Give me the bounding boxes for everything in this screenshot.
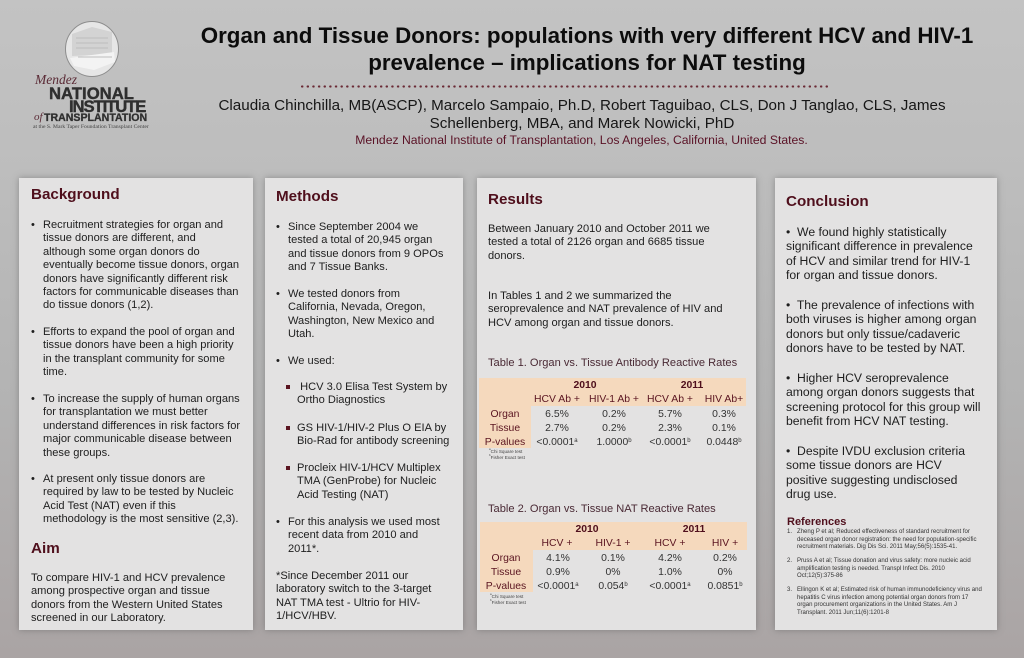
panel: methods: • bbox=[276, 516, 280, 528]
reference 1 bbox=[787, 528, 977, 550]
panel: background: • bbox=[31, 393, 35, 405]
table 2 header band bbox=[480, 522, 747, 550]
title bbox=[201, 23, 973, 75]
panel: conclusion: Transplant. 2011 Jun;11(6):1201-8 bbox=[797, 610, 889, 616]
panel: background: time. bbox=[43, 366, 67, 378]
panel: background: methodology is the most sensitive (2,3). bbox=[43, 513, 238, 525]
panel: background: these groups. bbox=[43, 447, 110, 459]
aim text bbox=[31, 572, 225, 624]
panel: conclusion: hepatitis C virus infection among potential organ donors from 17 bbox=[797, 595, 968, 601]
conclusion point 4 bbox=[786, 444, 966, 501]
panel: methods: Acid Testing (NAT) bbox=[297, 489, 388, 501]
panel: background: donors have significantly different risk bbox=[43, 273, 228, 285]
panel: background: factors for communicable diseases than bbox=[43, 286, 238, 298]
results paragraph 2: seroprevalence and NAT prevalence of HIV and bbox=[488, 303, 723, 315]
table 1: <0.0001b bbox=[649, 437, 691, 448]
heading: methods: Methods bbox=[276, 188, 338, 205]
table 2: 0.2% bbox=[713, 553, 737, 564]
panel: conclusion: deceased organ donor registration: the need for population-specific bbox=[797, 537, 977, 543]
table 2 footnotes bbox=[490, 592, 526, 605]
panel: methods: TMA (GenProbe) for Nucleic bbox=[297, 475, 436, 487]
row: tissue: Tissue bbox=[491, 567, 521, 578]
dotted divider bbox=[301, 85, 831, 88]
row: organ: Organ bbox=[492, 553, 520, 564]
panel: background: At present only tissue donors are bbox=[43, 473, 205, 485]
panel: methods: and tissue donors from 9 OPOs bbox=[288, 248, 443, 260]
panel: methods: • bbox=[276, 355, 280, 367]
table 2: 0.9% bbox=[546, 567, 570, 578]
panel: conclusion: 2. bbox=[787, 558, 792, 564]
results paragraph 1: Between January 2010 and October 2011 we bbox=[488, 223, 710, 235]
aim text: among prospective organ and tissue bbox=[31, 585, 210, 597]
conclusion point 3: • Higher HCV seroprevalence bbox=[786, 371, 949, 385]
panel: background: major communicable disease between bbox=[43, 433, 232, 445]
row: organ: Organ bbox=[491, 409, 519, 420]
year 2011: 2011 bbox=[681, 380, 703, 391]
sub-bullet: Procleix bbox=[286, 462, 441, 501]
authors: Schellenberg, MBA, and Marek Nowicki, PhD bbox=[430, 114, 734, 132]
table 2 footnotes: a Chi Square test bbox=[490, 592, 523, 599]
table 1: 0.1% bbox=[712, 423, 736, 434]
table 1 bbox=[479, 378, 746, 456]
panel: methods: • bbox=[276, 221, 280, 233]
table 2: HIV + bbox=[712, 538, 738, 549]
heading: results: Results bbox=[488, 191, 543, 208]
panel: conclusion: recruitment materials. Dig Dis Sci. 2011 May;56(5):1535-41. bbox=[797, 544, 957, 550]
table 2: HCV + bbox=[655, 538, 685, 549]
logo: Mendez National Institute of Transplantation bbox=[33, 21, 149, 130]
sub-bullet: HCV Elisa bbox=[286, 381, 448, 406]
panel: methods: We used: bbox=[288, 355, 335, 367]
aim text: To compare HIV-1 and HCV prevalence bbox=[31, 572, 225, 584]
table 1 caption: Table 1. Organ vs. Tissue Antibody Reactive Rates bbox=[488, 357, 737, 369]
panel: methods: recent data from 2010 and bbox=[288, 529, 418, 541]
panel: background: • bbox=[31, 473, 35, 485]
bullet 2 bbox=[31, 326, 235, 378]
panel: conclusion: Oct;12(5):375-86 bbox=[797, 573, 843, 579]
panel: background: tissue donors have been a high priority bbox=[43, 339, 234, 351]
conclusion point 3: among organ donors suggests that bbox=[786, 385, 974, 399]
panel: background: in the transplant community for some bbox=[43, 353, 225, 365]
table 2: 0.1% bbox=[601, 553, 625, 564]
panel: methods: 2011*. bbox=[288, 543, 319, 555]
footnote text: NAT TMA test - Ultrio for HIV- bbox=[276, 597, 420, 609]
logo word: National: NATIONAL bbox=[49, 84, 134, 102]
table 2 bbox=[480, 522, 747, 600]
table 1 header band bbox=[479, 378, 746, 406]
footnote text: *Since December 2011 our bbox=[276, 570, 408, 582]
panel: background: eventually become tissue donors, organ bbox=[43, 259, 239, 271]
panel: conclusion: Ellingon K et al; Estimated risk of human immunodeficiency virus and bbox=[797, 587, 982, 593]
row: p-values: P-values bbox=[485, 437, 525, 448]
aim text: screened in our Laboratory. bbox=[31, 612, 166, 624]
table 2 footnotes: b Fisher Exact test bbox=[490, 598, 526, 605]
panel: conclusion: Zheng P et al; Reduced effectiveness of standard recruitment for bbox=[797, 529, 970, 535]
panel: methods: We tested donors from bbox=[288, 288, 400, 300]
year 2010: 2010 bbox=[575, 524, 599, 535]
heading: references: References bbox=[787, 516, 846, 528]
panel: methods: Procleix HIV-1/HCV Multiplex bbox=[297, 462, 441, 474]
method bullet 1 bbox=[276, 221, 443, 273]
panel: methods: tested a total of 20,945 organ bbox=[288, 234, 432, 246]
table 2: 0.0851b bbox=[707, 581, 743, 592]
results paragraph 1: tested a total of 2126 organ and 6685 tissue bbox=[488, 236, 704, 248]
panel: background: • bbox=[31, 326, 35, 338]
table 1: HIV Ab+ bbox=[705, 394, 743, 405]
panel: methods: For this analysis we used most bbox=[288, 516, 440, 528]
panel: conclusion bbox=[775, 178, 997, 630]
table 1: 1.0000b bbox=[596, 437, 632, 448]
table 1: 0.0448b bbox=[706, 437, 742, 448]
logo word: Transplantation: TRANSPLANTATION bbox=[44, 112, 147, 124]
table 1 footnotes: b Fisher Exact test bbox=[489, 453, 525, 460]
title: Organ and Tissue Donors: populations with very different HCV and HIV-1 bbox=[201, 23, 973, 48]
results paragraph 2: HCV among organ and tissue donors. bbox=[488, 317, 674, 329]
footnote text: 1/HCV/HBV. bbox=[276, 610, 337, 622]
conclusion point 2: donors but only tissue/cadaveric bbox=[786, 327, 960, 341]
authors: Claudia Chinchilla, MB(ASCP), Marcelo Sampaio, Ph.D, Robert Taguibao, CLS, Don J Tanglao, CLS, James bbox=[218, 96, 946, 114]
row: p-values: P-values bbox=[486, 581, 526, 592]
conclusion point 1: of HCV and similar trend for HIV-1 bbox=[786, 254, 970, 268]
panel: background bbox=[19, 178, 253, 630]
conclusion point 4: drug use. bbox=[786, 487, 837, 501]
panel: background: To increase the supply of human organs bbox=[43, 393, 240, 405]
conclusion point 1: for organ and tissue donors. bbox=[786, 268, 938, 282]
table 1: <0.0001a bbox=[536, 437, 578, 448]
panel: methods: Ortho Diagnostics bbox=[297, 394, 385, 406]
logo tagline: at the S. Mark Taper Foundation Transplant Center bbox=[33, 124, 149, 130]
table 1 footnotes: a Chi Square test bbox=[489, 447, 522, 454]
table 2 caption: Table 2. Organ vs. Tissue NAT Reactive Rates bbox=[488, 503, 716, 515]
table 2: 1.0% bbox=[658, 567, 682, 578]
panel: methods: Bio-Rad for antibody screening bbox=[297, 435, 449, 447]
title: prevalence – implications for NAT testing bbox=[368, 50, 806, 75]
year 2010: 2010 bbox=[573, 380, 597, 391]
table 2 row label band bbox=[480, 550, 533, 592]
conclusion point 3: benefit from HCV NAT testing. bbox=[786, 414, 949, 428]
table 2: <0.0001a bbox=[537, 581, 579, 592]
footnote text: laboratory switch to the 3-target bbox=[276, 583, 431, 595]
method bullet 2 bbox=[276, 288, 434, 340]
table 2: HIV-1 + bbox=[596, 538, 630, 549]
panel: methods: HCV 3.0 Elisa Test System by bbox=[300, 381, 447, 393]
panel: methods bbox=[265, 178, 463, 630]
column headers: HCV + bbox=[542, 538, 572, 549]
logo word: Institute: INSTITUTE bbox=[69, 96, 145, 116]
table 2: <0.0001a bbox=[649, 581, 691, 592]
panel: conclusion: organ procurement organizations in the United States. Am J bbox=[797, 602, 957, 608]
table 1: HCV Ab + bbox=[647, 394, 693, 405]
panel: background: Acid Test (NAT) even if this bbox=[43, 500, 176, 512]
column headers: HCV Ab + bbox=[534, 394, 580, 405]
results paragraph 1 bbox=[488, 223, 710, 262]
table 2: 0% bbox=[605, 567, 621, 578]
panel: conclusion: amplification testing is needed. Transpl Infect Dis. 2010 bbox=[797, 566, 945, 572]
table 2: 0.054b bbox=[598, 581, 628, 592]
table 1 row label band bbox=[479, 406, 531, 448]
panel: conclusion: 1. bbox=[787, 529, 792, 535]
table 1: HIV-1 Ab + bbox=[589, 394, 639, 405]
heading: background: Background bbox=[31, 186, 120, 203]
results paragraph 1: donors. bbox=[488, 250, 525, 262]
table 2: 0% bbox=[717, 567, 733, 578]
year 2011: 2011 bbox=[683, 524, 705, 535]
heading: conclusion: Conclusion bbox=[786, 193, 869, 210]
aim text: donors from the Western United States bbox=[31, 599, 223, 611]
table 1: 0.2% bbox=[602, 409, 626, 420]
table 1: 2.7% bbox=[545, 423, 569, 434]
conclusion point 2 bbox=[786, 298, 976, 355]
table 1 footnotes bbox=[489, 447, 525, 460]
conclusion point 1: significant difference in prevalence bbox=[786, 239, 973, 253]
conclusion point 1 bbox=[786, 225, 973, 282]
conclusion point 4: some tissue donors are HCV bbox=[786, 458, 942, 472]
sub-bullet: GS HIV bbox=[286, 422, 449, 447]
results paragraph 2: In Tables 1 and 2 we summarized the bbox=[488, 290, 672, 302]
panel: background: Efforts to expand the pool of organ and bbox=[43, 326, 235, 338]
panel: methods: Utah. bbox=[288, 328, 315, 340]
logo script: of: of bbox=[34, 111, 43, 123]
method bullet 4 bbox=[276, 516, 440, 555]
panel: background: for transplantation we must better bbox=[43, 406, 208, 418]
panel: methods: Since September 2004 we bbox=[288, 221, 418, 233]
panel: background: although some organ donors do bbox=[43, 246, 200, 258]
row: tissue: Tissue bbox=[490, 423, 520, 434]
method bullet 3 bbox=[276, 355, 335, 367]
panel: background: do tissue donors (1,2). bbox=[43, 299, 153, 311]
panel: background: • bbox=[31, 219, 35, 231]
conclusion point 2: • The prevalence of infections with bbox=[786, 298, 974, 312]
conclusion point 3: screening protocol for this group will bbox=[786, 400, 980, 414]
table 2: 4.1% bbox=[546, 553, 570, 564]
panel: conclusion: Pruss A et al; Tissue donation and virus safety: more nucleic acid bbox=[797, 558, 971, 564]
heading: aim: Aim bbox=[31, 540, 60, 557]
conclusion point 1: • We found highly statistically bbox=[786, 225, 947, 239]
panel: background: understand differences in risk factors for bbox=[43, 420, 240, 432]
reference 2 bbox=[787, 558, 971, 579]
affiliation: Mendez National Institute of Transplantation, Los Angeles, California, United States. bbox=[355, 133, 808, 147]
bullet 4 bbox=[31, 473, 238, 525]
bullet 3 bbox=[31, 393, 240, 459]
table 2: 4.2% bbox=[658, 553, 682, 564]
conclusion point 3 bbox=[786, 371, 980, 428]
bullet 1 bbox=[31, 219, 239, 311]
panel: results bbox=[477, 178, 756, 630]
reference 3 bbox=[787, 586, 982, 616]
conclusion point 4: • Despite IVDU exclusion criteria bbox=[786, 444, 965, 458]
panel: methods: Washington, New Mexico and bbox=[288, 315, 434, 327]
conclusion point 2: both viruses is higher among organ bbox=[786, 312, 976, 326]
panel: methods: • bbox=[276, 288, 280, 300]
panel: background: required by law to be tested by Nucleic bbox=[43, 486, 234, 498]
results paragraph 2 bbox=[488, 290, 723, 329]
panel: methods: California, Nevada, Oregon, bbox=[288, 301, 426, 313]
table 1: 5.7% bbox=[658, 409, 682, 420]
panel: conclusion: 3. bbox=[787, 587, 792, 593]
authors bbox=[218, 96, 946, 132]
table 1: 2.3% bbox=[658, 423, 682, 434]
panel: background: Recruitment strategies for organ and bbox=[43, 219, 223, 231]
conclusion point 2: donors have to be tested by NAT. bbox=[786, 341, 965, 355]
icon: building seal bbox=[65, 21, 119, 77]
panel: methods: and 7 Tissue Banks. bbox=[288, 261, 388, 273]
footnote text bbox=[276, 570, 432, 622]
panel: background: tissue donors are different, and bbox=[43, 232, 196, 244]
panel: methods: GS HIV-1/HIV-2 Plus O EIA by bbox=[297, 422, 446, 434]
logo script: Mendez: Mendez bbox=[35, 72, 77, 87]
table 1: 0.2% bbox=[602, 423, 626, 434]
table 1: 6.5% bbox=[545, 409, 569, 420]
table 1: 0.3% bbox=[712, 409, 736, 420]
conclusion point 4: positive suggesting undisclosed bbox=[786, 473, 957, 487]
